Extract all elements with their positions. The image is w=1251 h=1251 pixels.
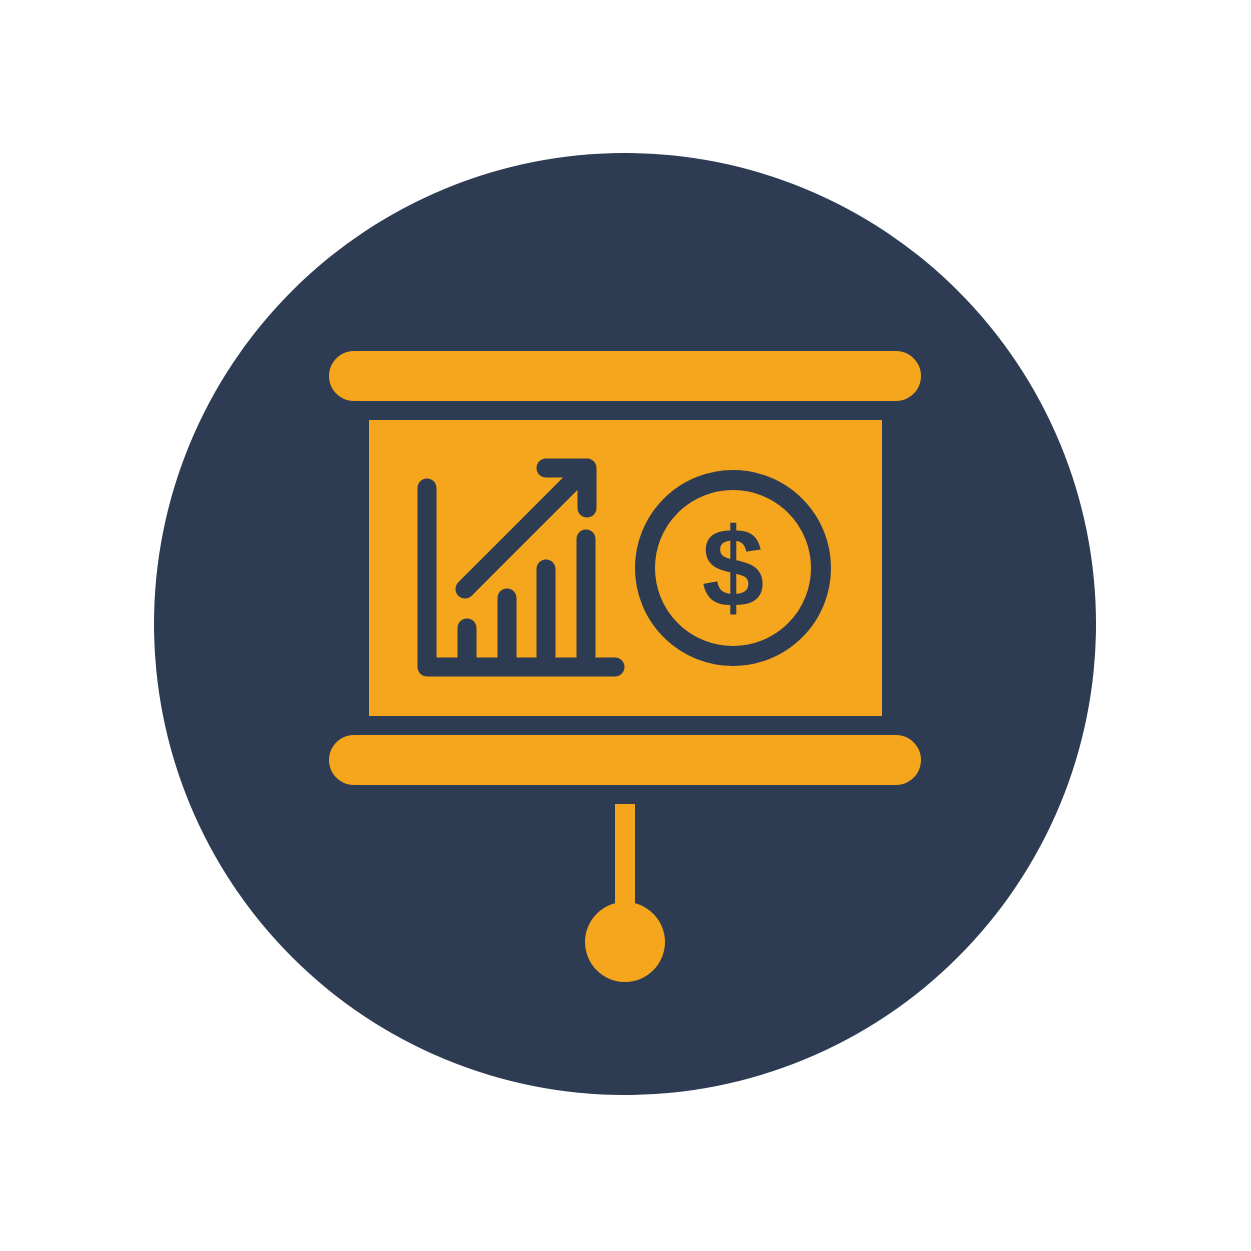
screen panel <box>369 420 882 716</box>
background circle <box>154 153 1096 1095</box>
stand with pull knob <box>585 804 665 982</box>
top bar of screen <box>329 351 921 401</box>
icon: dollar coin: $ <box>702 505 764 630</box>
bottom bar of screen <box>329 735 921 785</box>
icon: dollar coin <box>645 480 821 656</box>
bar chart with arrow <box>427 468 615 667</box>
